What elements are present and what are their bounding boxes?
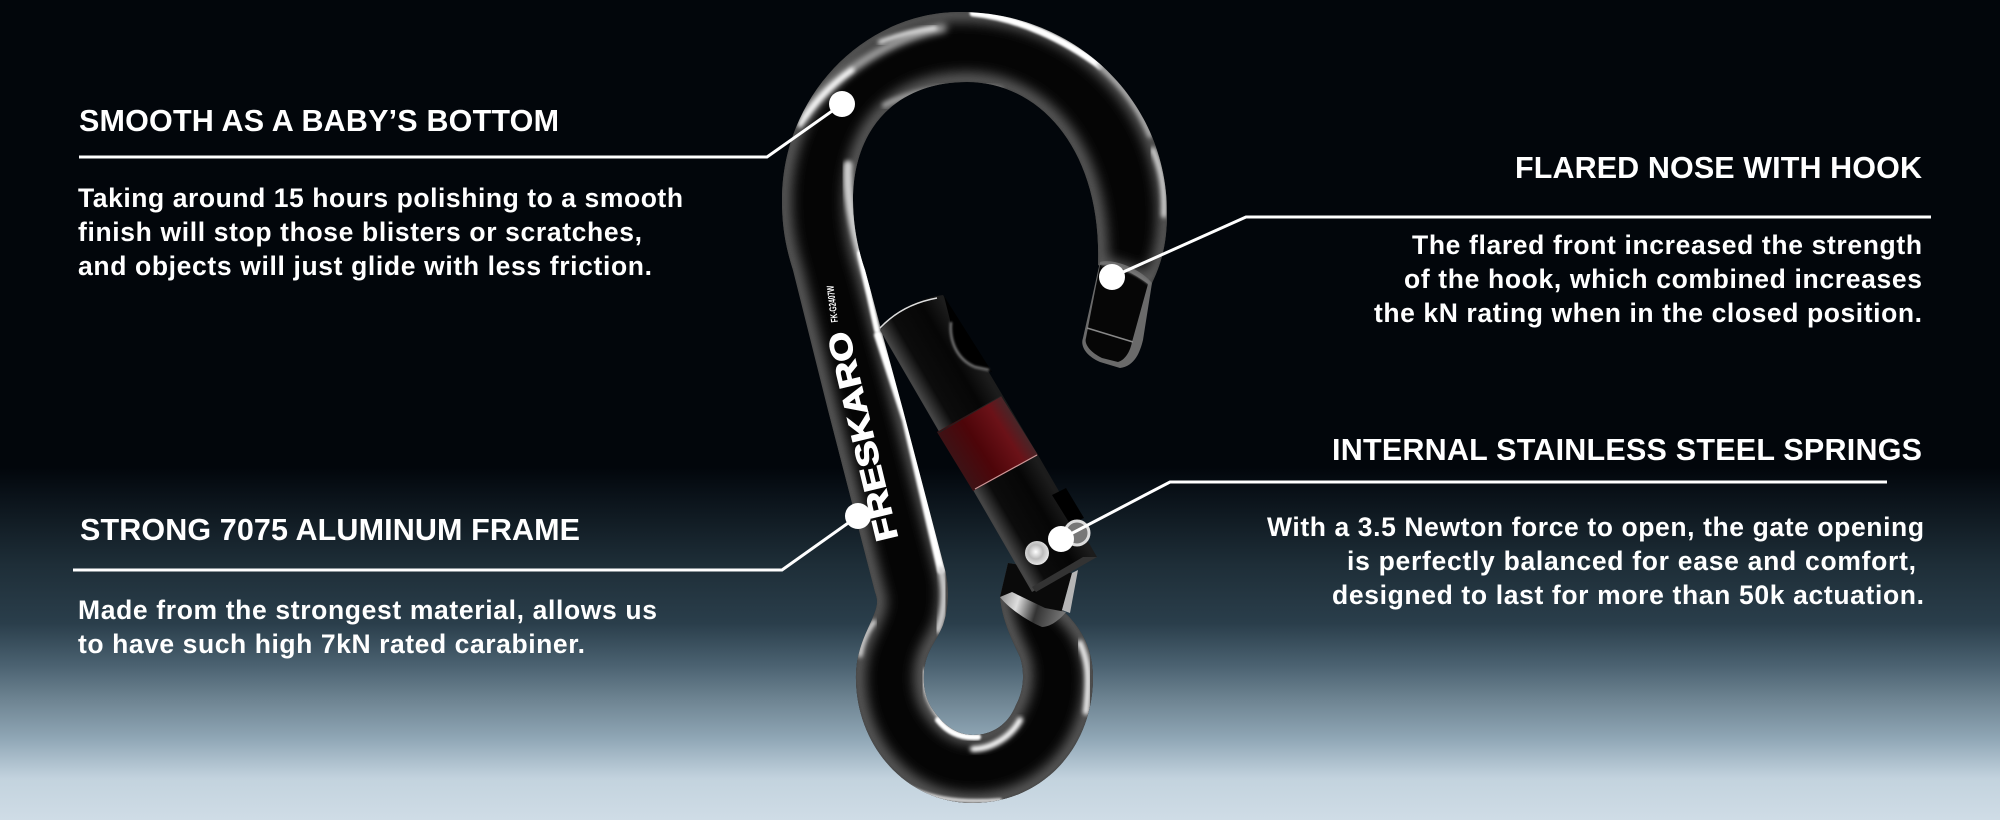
nose tip — [1082, 261, 1152, 368]
leader line and dot — [1099, 217, 1931, 290]
description: The flared front increased the strength — [1412, 230, 1922, 260]
rivet — [1025, 541, 1049, 565]
leader line and dot — [79, 91, 855, 157]
gate window — [1052, 488, 1084, 524]
description — [78, 183, 683, 281]
pin ring — [1065, 521, 1089, 545]
brand name on frame: FRESKARO — [821, 328, 905, 545]
callout: smooth as a baby's bottom — [78, 91, 855, 281]
callout: internal stainless steel springs — [1048, 433, 1924, 610]
model number on frame: FK-G2407W — [826, 285, 841, 323]
description: and objects will just glide with less friction. — [78, 251, 652, 281]
red band — [937, 396, 1038, 491]
callout: strong 7075 aluminum frame — [73, 503, 871, 659]
gate base plate — [1032, 557, 1097, 592]
spring gate — [880, 295, 1097, 592]
leader line and dot — [1048, 482, 1887, 552]
gate collar — [1000, 563, 1078, 627]
heading: SMOOTH AS A BABY’S BOTTOM — [79, 104, 559, 138]
description: to have such high 7kN rated carabiner. — [78, 629, 585, 659]
description: finish will stop those blisters or scratches, — [78, 217, 642, 247]
description: designed to last for more than 50k actuation. — [1332, 580, 1924, 610]
heading: INTERNAL STAINLESS STEEL SPRINGS — [1332, 433, 1922, 467]
description: With a 3.5 Newton force to open, the gate opening — [1267, 512, 1924, 542]
description: Taking around 15 hours polishing to a smooth — [78, 183, 683, 213]
description: of the hook, which combined increases — [1404, 264, 1922, 294]
description — [78, 595, 657, 659]
description — [1374, 230, 1922, 328]
description: the kN rating when in the closed position. — [1374, 298, 1922, 328]
heading: STRONG 7075 ALUMINUM FRAME — [80, 513, 580, 547]
callout: flared nose with hook — [1099, 151, 1931, 328]
carabiner illustration — [782, 12, 1167, 803]
gate slot — [944, 296, 992, 372]
heading: FLARED NOSE WITH HOOK — [1515, 151, 1922, 185]
leader line and dot — [73, 503, 871, 570]
description: Made from the strongest material, allows us — [78, 595, 657, 625]
description: is perfectly balanced for ease and comfort, — [1347, 546, 1916, 576]
carabiner frame — [782, 12, 1167, 803]
description — [1267, 512, 1924, 610]
